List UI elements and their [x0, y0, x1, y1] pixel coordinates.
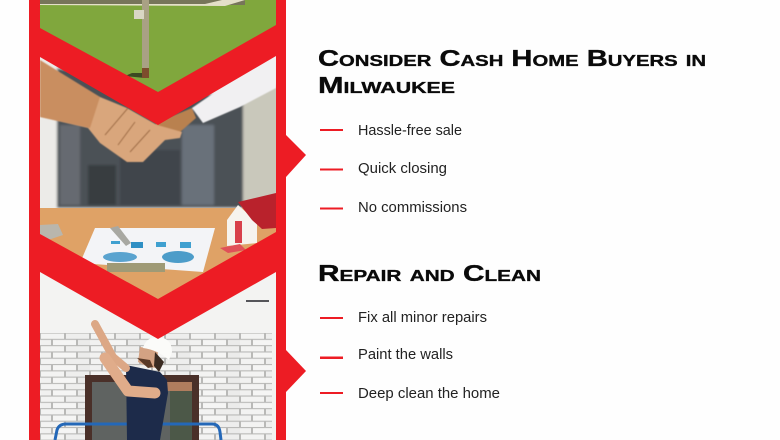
arrow lower	[286, 350, 306, 392]
item: paint the walls: Paint the walls	[358, 346, 453, 363]
item: hassle-free sale: Hassle-free sale	[358, 122, 462, 139]
chevron upper	[40, 25, 276, 125]
section: repair and clean	[318, 260, 541, 402]
ceiling	[40, 272, 276, 333]
window	[85, 375, 199, 440]
stationery	[40, 224, 63, 241]
chevron lower	[40, 232, 276, 339]
heading: Repair and Clean	[318, 260, 541, 286]
scaffold	[55, 424, 221, 440]
photo: lawn with sign post	[40, 0, 276, 100]
worker	[95, 324, 172, 440]
heading: Consider Cash Home Buyers in	[318, 45, 706, 71]
item: deep clean the home: Deep clean the home	[358, 385, 500, 402]
item: no commissions: No commissions	[358, 199, 467, 216]
item: quick closing: Quick closing	[358, 160, 447, 177]
arrow upper	[286, 135, 306, 177]
item: fix all minor repairs: Fix all minor repairs	[358, 309, 487, 326]
office background	[40, 56, 276, 208]
panel: photo column	[36, 0, 280, 440]
frame: red chevrons and side bars	[29, 0, 306, 440]
heading: Milwaukee	[318, 72, 455, 98]
section: consider cash home buyers	[318, 45, 706, 216]
handshake	[40, 50, 276, 162]
photo: handshake and desk	[36, 40, 280, 300]
item: quick closing	[320, 160, 447, 177]
model house	[220, 193, 276, 253]
photo: worker at brick wall	[40, 272, 276, 440]
left bar	[29, 0, 40, 440]
clipboard	[80, 226, 215, 272]
right bar	[276, 0, 286, 440]
desk surface	[40, 208, 276, 300]
brick wall	[40, 333, 272, 440]
